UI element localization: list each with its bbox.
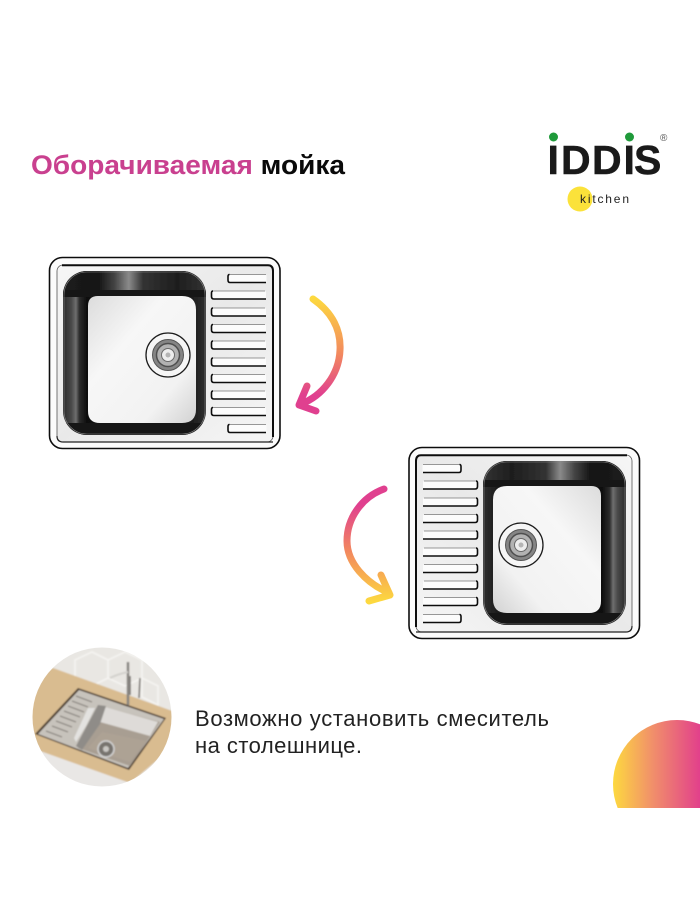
arrow: pink to yellow counter-clockwise <box>347 489 390 601</box>
arrow: yellow to pink clockwise <box>299 299 340 411</box>
caption text: Возможно установить смеситель <box>195 706 549 731</box>
logo: IDDIS kitchen: D <box>592 137 622 183</box>
logo: IDDIS kitchen: ® <box>660 133 668 144</box>
bottom sink photo (mirrored) <box>409 448 640 638</box>
caption text <box>195 706 549 758</box>
title: Оборачиваемая мойка <box>31 150 345 180</box>
top sink photo <box>50 258 280 448</box>
caption text: на столешнице. <box>195 733 362 758</box>
faucet <box>127 662 129 705</box>
logo: IDDIS kitchen <box>548 132 668 212</box>
logo: IDDIS kitchen: D <box>561 137 591 183</box>
logo: IDDIS kitchen: I <box>548 137 559 183</box>
sink <box>35 688 166 770</box>
logo: IDDIS kitchen: I <box>624 137 635 183</box>
worktop <box>32 668 172 782</box>
logo: IDDIS kitchen: S <box>634 137 661 183</box>
round kitchen photo <box>32 648 172 786</box>
decorative gradient circle <box>613 720 700 808</box>
logo: IDDIS kitchen: kitchen <box>580 192 629 206</box>
